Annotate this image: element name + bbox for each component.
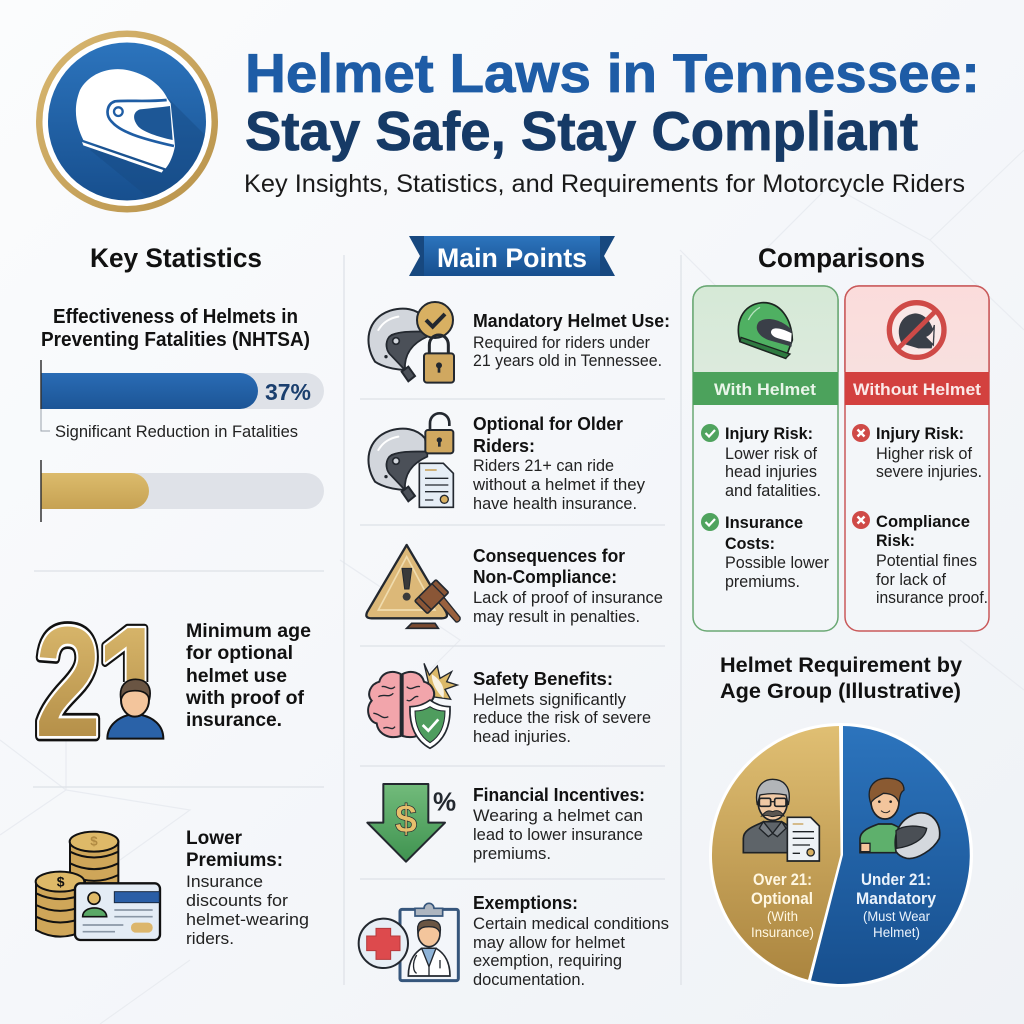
- icon: older rider with document: [743, 779, 819, 861]
- text: exemptions: [473, 893, 669, 989]
- text: consequences: [473, 546, 663, 626]
- banner: main points: [409, 236, 615, 276]
- text: lower premiums: Insurance: [186, 873, 263, 891]
- text: lower premiums: Premiums:: [186, 849, 283, 871]
- bar chart heading: Preventing Fatalities (NHTSA): [41, 329, 310, 351]
- heading: comparisons: Comparisons: [758, 243, 925, 273]
- icon: down arrow with dollar and percent: $: [395, 798, 417, 842]
- text: minimum age: insurance.: [186, 709, 282, 731]
- card: with helmet: With Helmet: [714, 380, 816, 399]
- text: exemptions: Certain medical conditions: [473, 915, 669, 933]
- pie label: over 21: Over 21:: [753, 871, 812, 889]
- text: with helmet list: Injury Risk:: [725, 424, 813, 443]
- bar chart heading: Effectiveness of Helmets in: [53, 306, 298, 328]
- pie label: over 21: (With: [767, 909, 798, 924]
- card: without helmet: [845, 286, 989, 631]
- text: lower premiums: riders.: [186, 930, 234, 948]
- text: with helmet list: Costs:: [725, 534, 775, 553]
- panel: main points: [359, 236, 670, 989]
- pie label: over 21: Insurance): [751, 925, 814, 940]
- icon: optional helmet with open lock and document: [368, 413, 453, 507]
- title: [245, 42, 980, 162]
- pie chart: helmet requirement by age: [709, 723, 973, 987]
- pie label: under 21: Helmet): [873, 925, 920, 940]
- icon: down arrow with dollar and percent: %: [433, 787, 456, 817]
- text: minimum age: helmet use: [186, 665, 287, 687]
- text: safety benefits: Safety Benefits:: [473, 669, 613, 689]
- icon: number 21 with rider: 1: [96, 594, 169, 770]
- text: with helmet list: Insurance: [725, 513, 803, 532]
- icon: warning triangle with gavel: [366, 545, 460, 628]
- x marks: [852, 424, 870, 529]
- text: optional for older riders: have health insurance.: [473, 495, 637, 513]
- text: optional for older riders: Riders 21+ can ride: [473, 457, 614, 475]
- text: consequences: Non-Compliance:: [473, 567, 617, 587]
- panel: key statistics: [33, 243, 324, 948]
- bar caption: Significant Reduction in Fatalities: [55, 422, 298, 441]
- text: safety benefits: Helmets significantly: [473, 691, 627, 709]
- text: without helmet list: for lack of: [876, 571, 946, 589]
- icon: brain with shield: [368, 663, 457, 748]
- text: consequences: Lack of proof of insurance: [473, 589, 663, 607]
- pie label: under 21: Under 21:: [861, 871, 931, 889]
- text: with helmet list: premiums.: [725, 573, 800, 591]
- icon: mandatory helmet with check and lock: [368, 302, 454, 383]
- text: financial incentives: [473, 785, 645, 863]
- text: with helmet list: head injuries: [725, 463, 817, 481]
- text: safety benefits: reduce the risk of severe: [473, 709, 651, 727]
- icon: number 21 with rider: 2: [35, 595, 101, 770]
- column dividers: [344, 255, 681, 985]
- icon: number 21 with rider: 2: [35, 595, 101, 770]
- text: financial incentives: Wearing a helmet can: [473, 807, 643, 825]
- text: consequences: may result in penalties.: [473, 608, 640, 626]
- icon: number 21 with rider: [35, 621, 164, 742]
- icon: clipboard doctor and red cross: [359, 903, 458, 981]
- text: without helmet list: Compliance: [876, 512, 970, 531]
- icon: coins and insurance card: $: [90, 834, 98, 849]
- text: optional for older riders: [472, 414, 646, 513]
- text: without helmet list: Potential fines: [876, 552, 977, 570]
- bar chart: 37 percent: 37%: [265, 379, 311, 405]
- heading: key statistics: Key Statistics: [90, 243, 262, 273]
- icon: no helmet: [889, 303, 944, 357]
- text: minimum age: for optional: [186, 642, 293, 664]
- text: without helmet list: Risk:: [876, 531, 915, 550]
- text: exemptions: documentation.: [473, 971, 585, 989]
- title: Stay Safe, Stay Compliant: [245, 100, 918, 162]
- text: consequences: Consequences for: [473, 546, 625, 566]
- text: mandatory helmet use: Required for riders under: [473, 334, 650, 352]
- text: exemptions: may allow for helmet: [473, 934, 625, 952]
- banner: main points: Main Points: [437, 243, 587, 273]
- card: with helmet: [693, 286, 838, 631]
- heading: pie chart: Helmet Requirement by: [720, 654, 962, 677]
- text: exemptions: Exemptions:: [473, 893, 578, 913]
- text: without helmet list: Higher risk of: [876, 445, 972, 463]
- icon: young rider with helmet: [860, 778, 940, 859]
- text: financial incentives: Financial Incentives:: [473, 785, 645, 805]
- text: safety benefits: head injuries.: [473, 728, 571, 746]
- pie label: under 21: (Must Wear: [863, 909, 930, 924]
- text: with helmet list: Lower risk of: [725, 445, 817, 463]
- pie label: under 21: Mandatory: [856, 890, 937, 908]
- text: optional for older riders: Optional for Older: [473, 414, 623, 434]
- text: financial incentives: premiums.: [473, 845, 551, 863]
- icon: down arrow with dollar and percent: [367, 784, 456, 862]
- text: lower premiums: Lower: [186, 827, 242, 849]
- card: without helmet: Without Helmet: [853, 380, 981, 399]
- text: without helmet list: insurance proof.: [876, 589, 988, 607]
- text: minimum age: Minimum age: [186, 620, 311, 642]
- logo: helmet badge: [36, 30, 220, 215]
- text: without helmet list: severe injuries.: [876, 463, 982, 481]
- text: lower premiums: helmet-wearing: [186, 911, 309, 929]
- icon: coins and insurance card: [36, 832, 160, 940]
- heading: pie chart: Age Group (Illustrative): [720, 680, 961, 703]
- icon: coins and insurance card: $: [57, 874, 65, 890]
- text: lower premiums: [186, 827, 309, 948]
- pie label: over 21: Optional: [751, 890, 813, 908]
- text: financial incentives: lead to lower insurance: [473, 826, 643, 844]
- bar chart heading: [41, 306, 310, 351]
- text: optional for older riders: without a helmet if they: [472, 476, 646, 494]
- text: optional for older riders: Riders:: [473, 436, 535, 456]
- text: mandatory helmet use: Mandatory Helmet Use:: [473, 311, 670, 331]
- text: with helmet list: Possible lower: [725, 554, 829, 572]
- text: without helmet list: [876, 424, 988, 607]
- heading: pie chart: [720, 654, 962, 703]
- text: with helmet list: [725, 424, 829, 591]
- text: exemptions: exemption, requiring: [473, 952, 622, 970]
- text: without helmet list: Injury Risk:: [876, 424, 964, 443]
- text: mandatory helmet use: [473, 311, 670, 370]
- bar chart: 37 percent: [41, 360, 324, 431]
- title: Helmet Laws in Tennessee:: [245, 42, 980, 104]
- text: mandatory helmet use: 21 years old in Tennessee.: [473, 352, 662, 370]
- bar chart: gold bar: [41, 460, 324, 522]
- panel: comparisons: [693, 243, 989, 987]
- check marks: [701, 424, 719, 531]
- text: minimum age: [185, 620, 311, 731]
- pie label: over 21: [751, 871, 814, 940]
- text: safety benefits: [473, 669, 651, 746]
- subtitle: Key Insights, Statistics, and Requirements for Motorcycle Riders: [244, 170, 965, 198]
- text: minimum age: with proof of: [185, 687, 304, 709]
- icon: green helmet: [738, 303, 792, 358]
- icon: number 21 with rider: 1: [96, 594, 169, 770]
- text: with helmet list: and fatalities.: [725, 482, 821, 500]
- pie label: under 21: [856, 871, 937, 940]
- text: lower premiums: discounts for: [186, 892, 289, 910]
